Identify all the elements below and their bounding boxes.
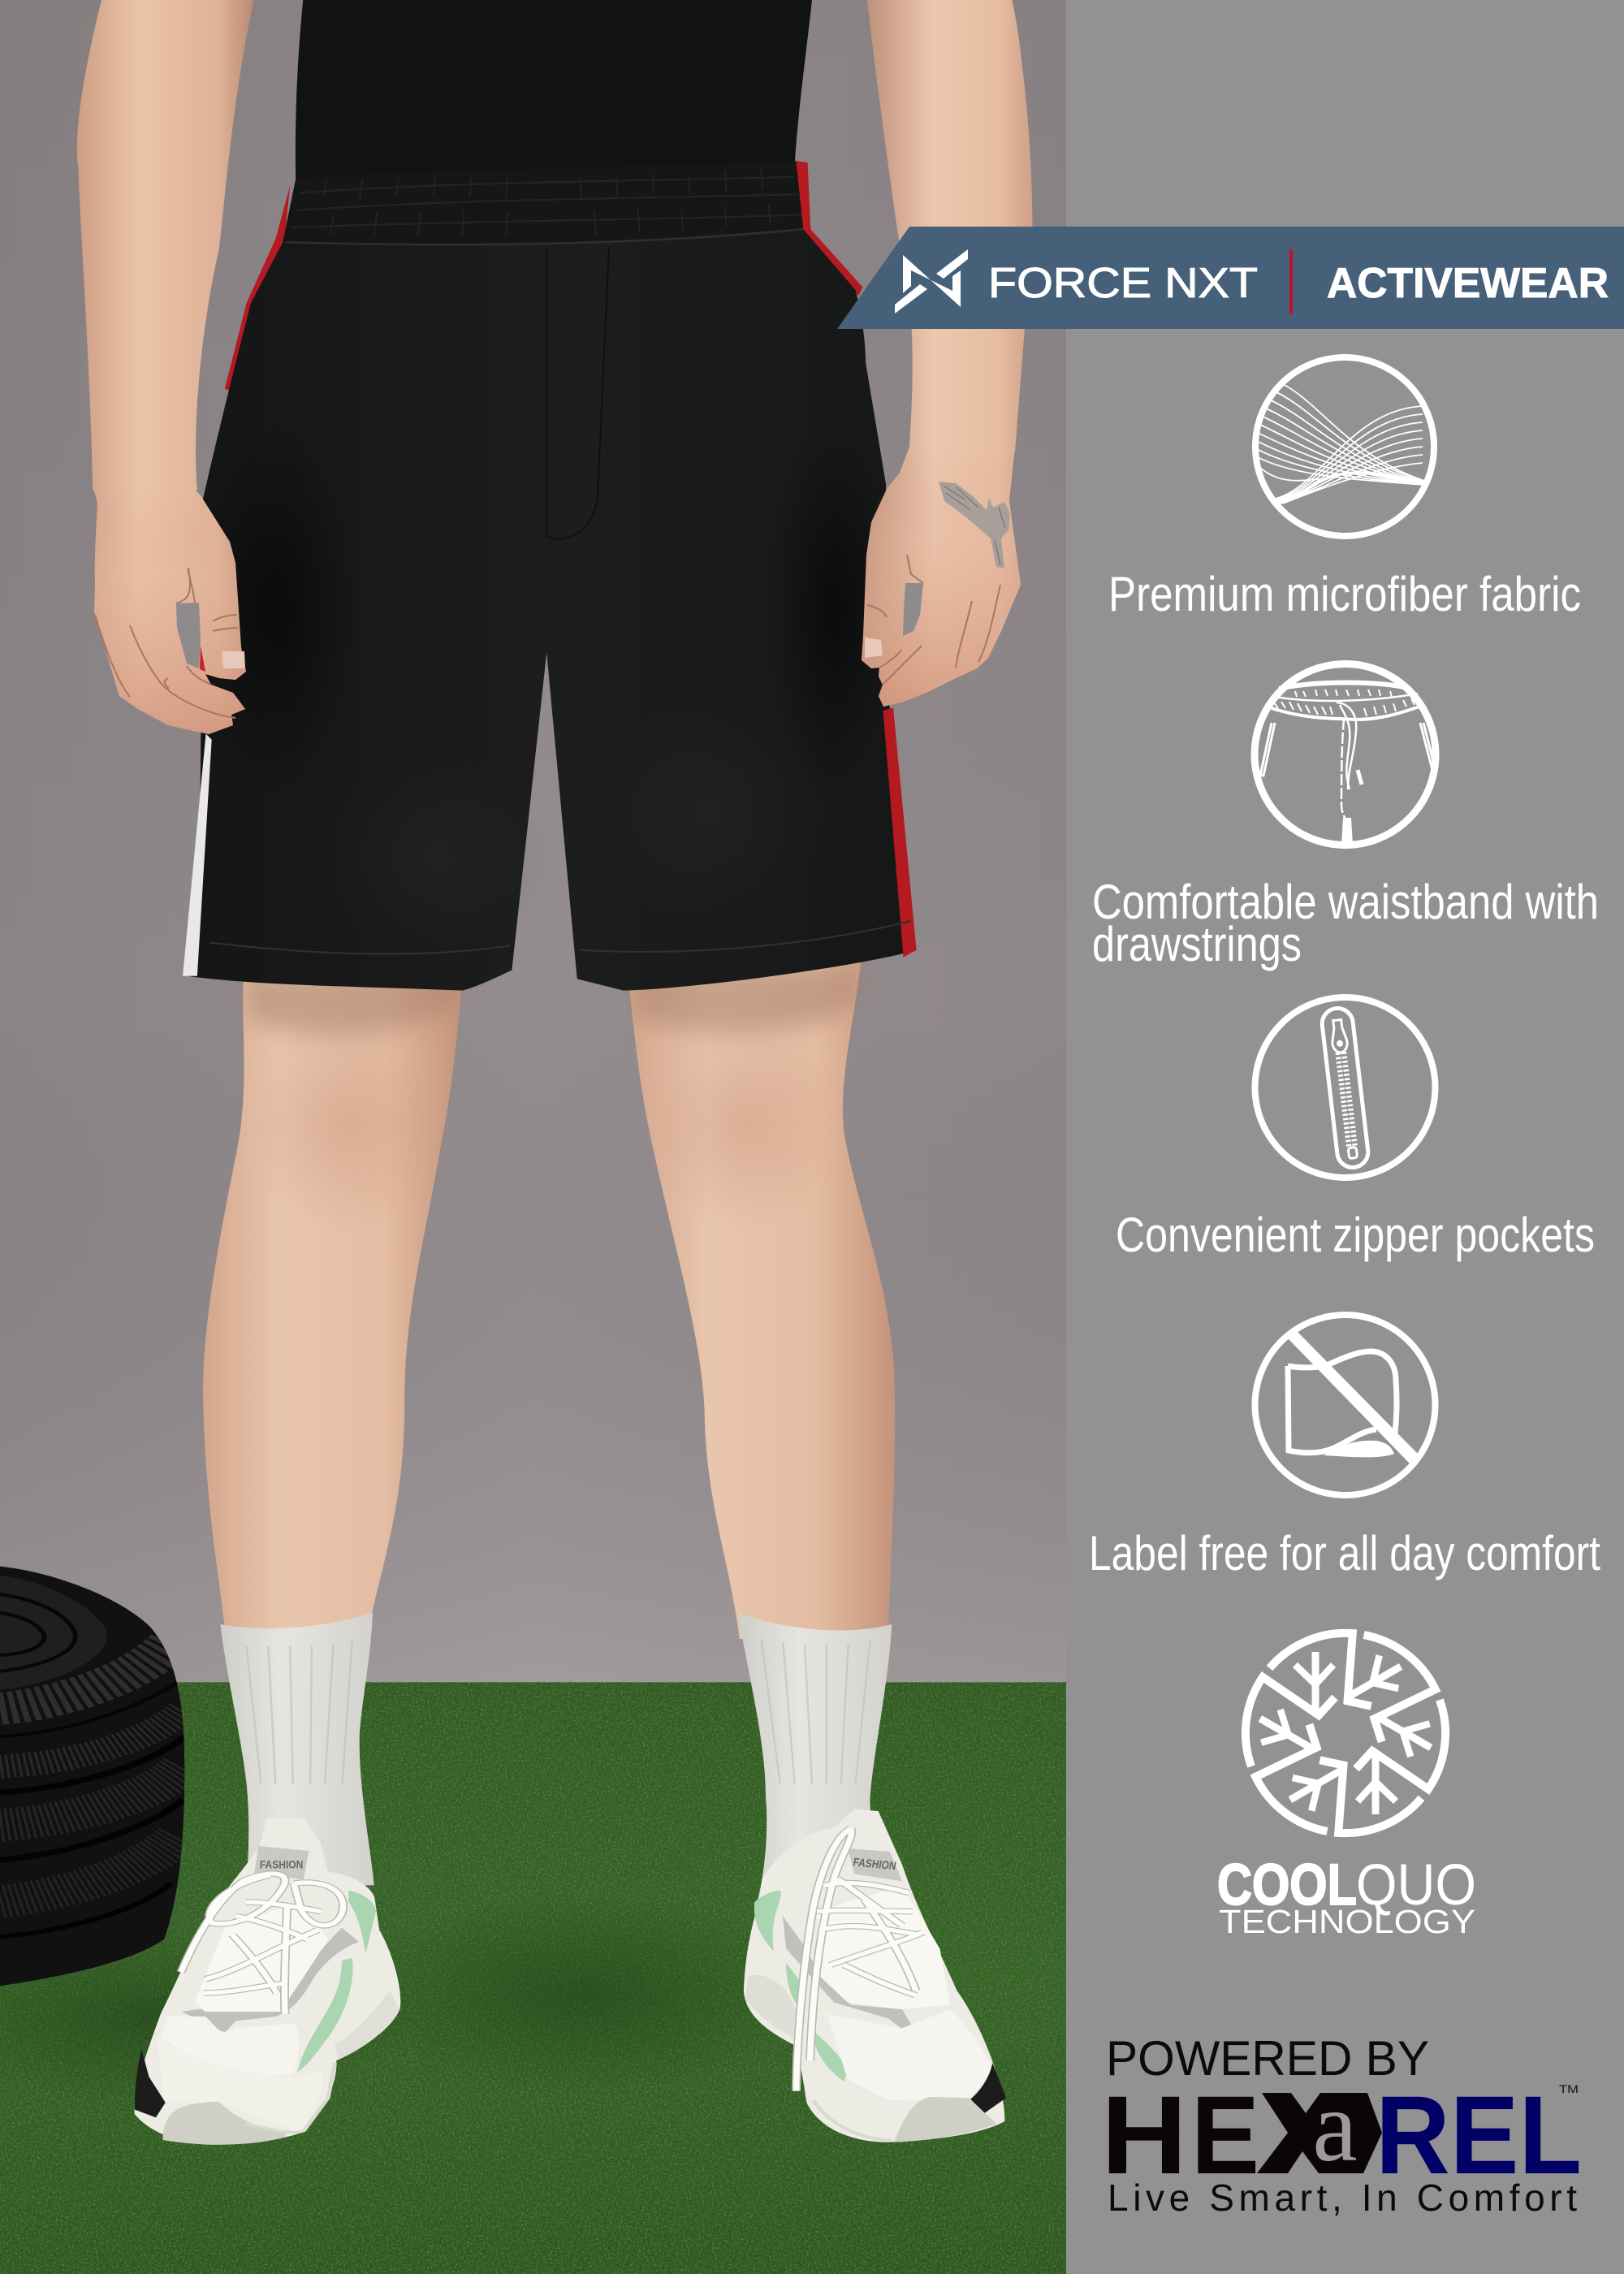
fly placket bbox=[546, 247, 609, 539]
banner: force nxt activewear bbox=[837, 227, 1624, 329]
shoe label text: FASHION bbox=[260, 1858, 303, 1871]
gap between thumb and fingers bbox=[176, 603, 201, 668]
text: tagline: Live Smart, In Comfort bbox=[1108, 2177, 1577, 2219]
black shorts with side stripes bbox=[183, 161, 917, 991]
wordmark: hexarel: H bbox=[1101, 2073, 1187, 2198]
wordmark: hexarel: REL bbox=[1376, 2073, 1582, 2198]
wordmark: hexarel bbox=[1101, 2071, 1582, 2198]
tyre bbox=[0, 1567, 184, 1986]
upper arms bbox=[77, 0, 1032, 491]
logo: coolquo technology bbox=[1217, 1853, 1476, 1940]
icon: label free bbox=[1255, 1315, 1436, 1495]
right sneaker bbox=[744, 1809, 1006, 2142]
white socks bbox=[220, 1613, 892, 1903]
left hand bbox=[93, 487, 246, 734]
left sneaker bbox=[135, 1818, 400, 2145]
legs bbox=[203, 958, 895, 1646]
icon: waistband with drawstrings bbox=[1255, 664, 1436, 845]
text: powered by: POWERED BY bbox=[1106, 2031, 1429, 2086]
shoe label text: FASHION bbox=[852, 1856, 897, 1873]
logo: coolquo technology: TECHNOLOGY bbox=[1219, 1903, 1475, 1940]
gap between thumb and fingers bbox=[903, 583, 923, 636]
icon: microfiber fabric bbox=[1255, 357, 1434, 536]
logo: coolquo technology: QUO bbox=[1356, 1853, 1476, 1917]
icon: snowflake coolquo bbox=[1225, 1606, 1466, 1861]
elastic waistband bbox=[283, 161, 803, 244]
artificial grass floor bbox=[0, 1682, 1067, 2274]
text: force nxt: FORCE NXT bbox=[988, 260, 1258, 307]
panel: feature column bbox=[1066, 0, 1624, 2274]
photo: model wearing black shorts bbox=[0, 0, 1067, 2274]
text: comfortable waistband bbox=[1092, 875, 1599, 971]
tattoo: bird bbox=[939, 482, 1010, 568]
wordmark: hexarel: E bbox=[1191, 2073, 1259, 2198]
wordmark: hexarel: TM bbox=[1559, 2082, 1579, 2095]
right hand bbox=[862, 447, 1021, 707]
logo: powered by hexarel bbox=[1101, 2031, 1582, 2219]
icon: zipper pocket bbox=[1255, 997, 1436, 1178]
text: activewear: ACTIVEWEAR bbox=[1327, 260, 1609, 307]
red stripe on leg hem bbox=[883, 707, 917, 958]
icon: force nxt logo mark bbox=[895, 249, 968, 313]
black t-shirt bbox=[296, 0, 812, 184]
white side stripe bbox=[183, 734, 212, 976]
logo: coolquo technology: COOL bbox=[1217, 1853, 1357, 1917]
studio wall bbox=[0, 0, 1067, 1685]
red upper stripes bbox=[225, 161, 862, 391]
text: comfortable waistband: drawstrings bbox=[1092, 917, 1302, 971]
wordmark: hexarel: a bbox=[1312, 2071, 1358, 2183]
